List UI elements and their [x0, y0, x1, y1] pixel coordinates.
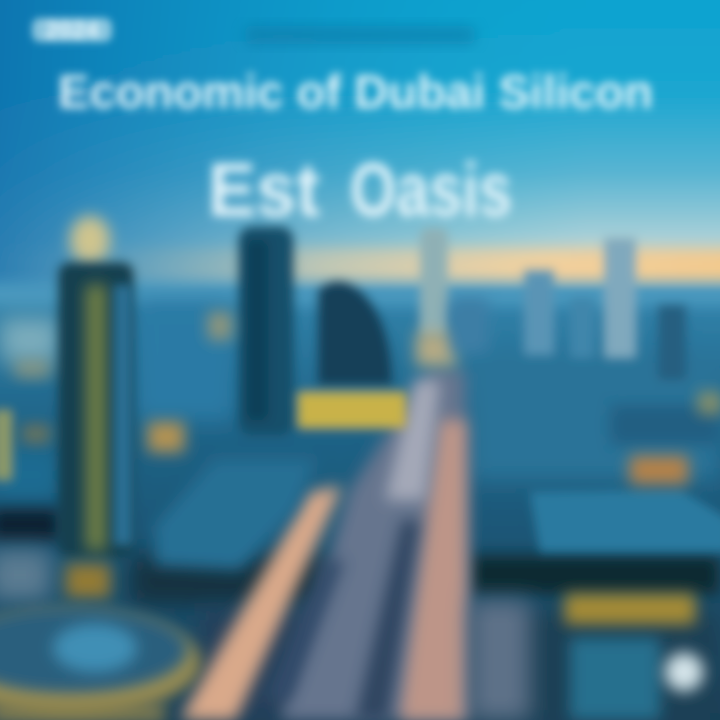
- title: second line: Oasis: [350, 148, 512, 233]
- buildings: right district: [530, 392, 720, 720]
- title: first line: Economic of Dubai Silicon: [58, 65, 653, 118]
- buildings: left district: [0, 312, 315, 570]
- badge text: 2024: [45, 17, 99, 44]
- background: sky: [0, 0, 720, 300]
- badge text: [32, 17, 112, 44]
- skyscraper: left tall tower: [58, 216, 134, 598]
- skyscraper: pale tower at road end: [416, 228, 488, 366]
- road: central boulevard: [180, 370, 530, 720]
- small dark subtitle bar: [245, 26, 475, 44]
- background: city ground: [0, 283, 720, 720]
- title: second line: [208, 148, 512, 233]
- skyscraper: rounded tower with yellow base: [298, 281, 406, 428]
- buildings: bottom-left dome: [0, 606, 200, 720]
- title: second line: Est: [208, 148, 320, 233]
- skyscraper: centre dark tower: [238, 226, 294, 436]
- skyscrapers: right skyline: [524, 238, 686, 380]
